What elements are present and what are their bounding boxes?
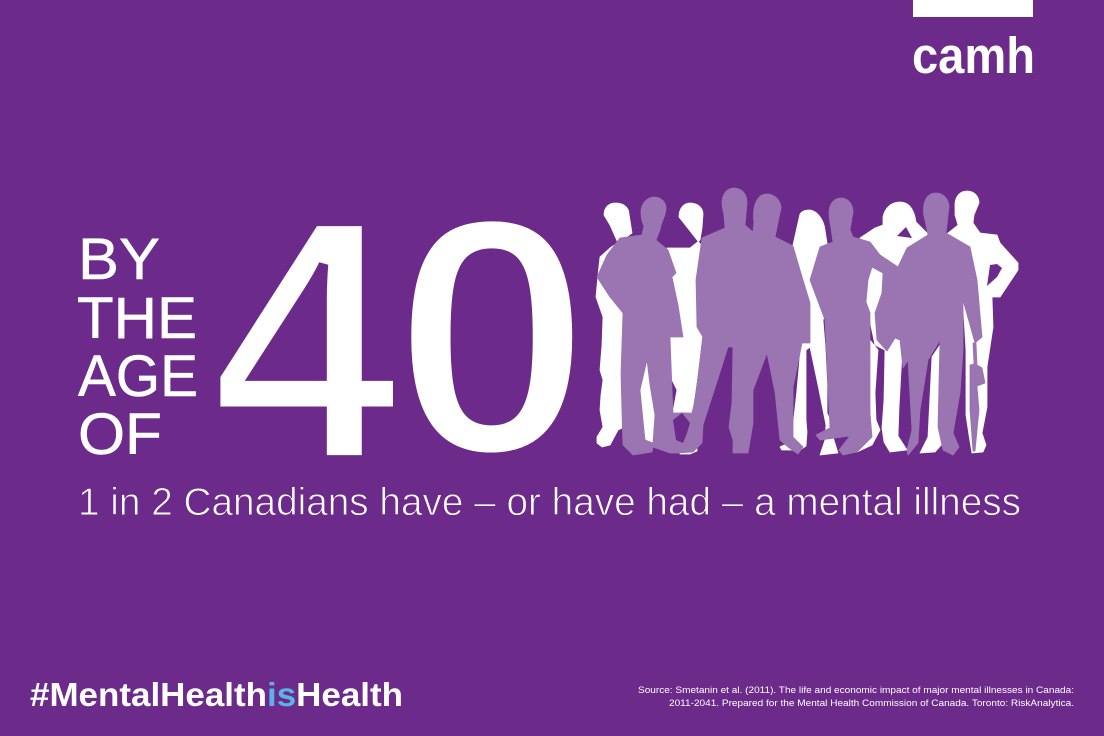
silhouettes: group of people — [596, 188, 1018, 455]
figure: left man — [597, 197, 692, 455]
big number 40 — [210, 146, 592, 534]
logo: camh — [912, 0, 1035, 84]
heading: by the age of: BY — [78, 227, 160, 292]
white figures in the back — [596, 191, 1018, 455]
heading: by the age of: THE — [77, 286, 197, 351]
source citation — [638, 685, 1074, 709]
logo: camh: camh — [912, 27, 1035, 84]
big number 40: 4 — [210, 146, 402, 534]
purple figures in the front — [597, 188, 985, 455]
statement text: 1 in 2 Canadians have – or have had – a mental illness — [78, 481, 1021, 524]
big number 40: 0 — [392, 147, 592, 527]
heading: by the age of: AGE — [78, 344, 198, 409]
figure: right-centre man — [810, 193, 982, 455]
hashtag: #MentalHealth isHealth — [30, 676, 403, 713]
heading: by the age of — [77, 227, 198, 467]
background-colour gaps in white figures — [897, 227, 1002, 286]
figure: two central men — [677, 188, 810, 454]
icon: umbrella — [970, 343, 985, 451]
heading: by the age of: OF — [78, 402, 162, 467]
source citation: 2011-2041. Prepared for the Mental Health Commission of Canada. Toronto: RiskAnalytica. — [669, 698, 1074, 709]
background-colour gaps between legs — [673, 413, 690, 443]
source citation: Source: Smetanin et al. (2011). The life and economic impact of major mental illnesses in Canada: — [638, 685, 1074, 696]
